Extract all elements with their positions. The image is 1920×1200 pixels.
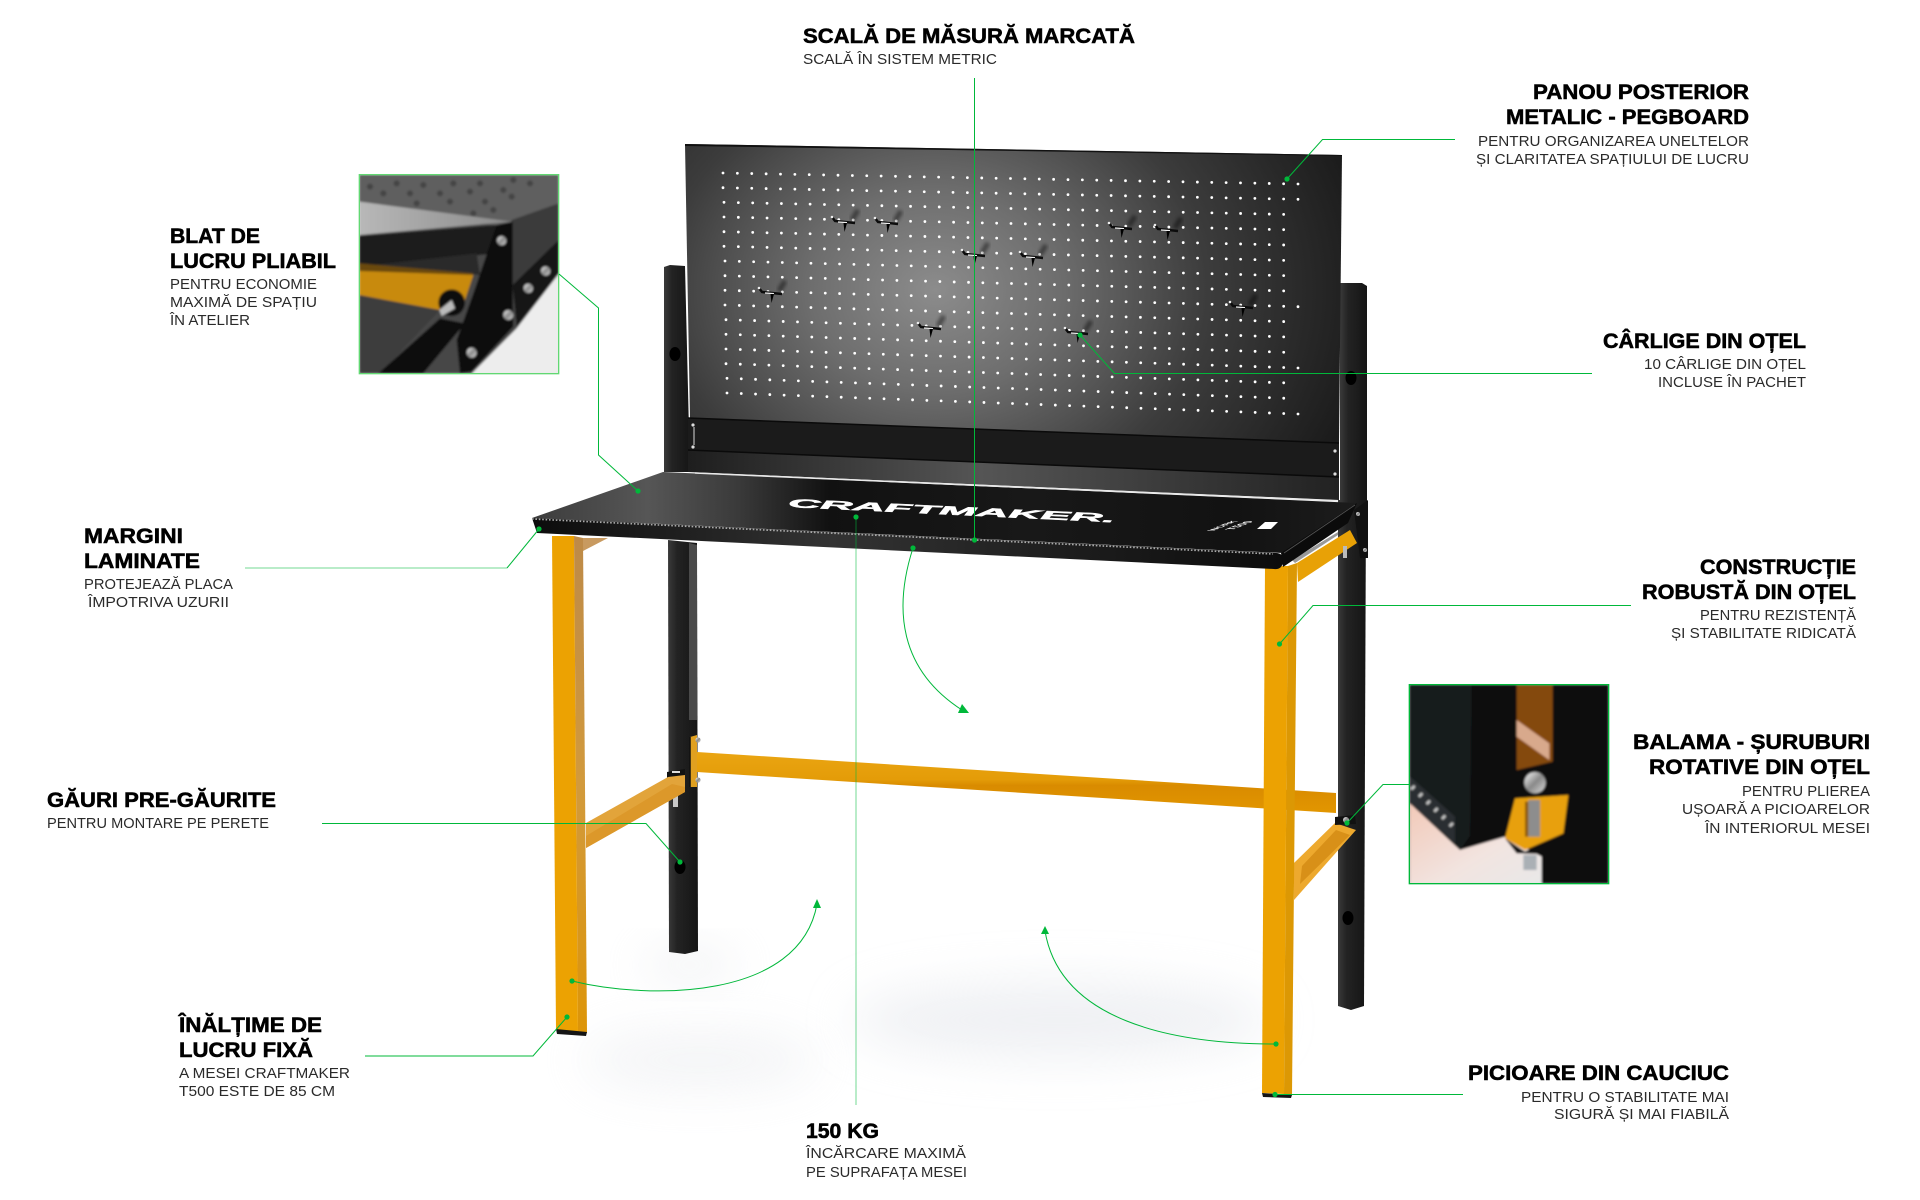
back posts	[664, 265, 1367, 505]
left hinge hardware	[667, 735, 701, 807]
heading	[1642, 556, 1856, 604]
leader line	[1077, 332, 1592, 374]
heading	[170, 225, 336, 273]
description: PENTRU MONTARE PE PERETE	[47, 816, 269, 832]
description: MAXIMĂ DE SPAȚIU	[170, 294, 317, 311]
callout: laminated edges	[84, 525, 542, 611]
heading	[1506, 81, 1749, 129]
description: PROTEJEAZĂ PLACA	[84, 576, 233, 593]
description: A MESEI CRAFTMAKER	[179, 1066, 350, 1082]
description: ÎN ATELIER	[169, 312, 250, 329]
description: 10 CÂRLIGE DIN OȚEL	[1644, 356, 1806, 373]
callout: fixed working height	[178, 1013, 570, 1100]
heading: 150 KG	[806, 1120, 879, 1143]
description: ÎMPOTRIVA UZURII	[87, 594, 229, 611]
leader line	[559, 274, 641, 494]
description	[84, 576, 233, 611]
side braces	[583, 538, 1356, 900]
workbench illustration	[532, 144, 1368, 1098]
leader line	[1284, 140, 1455, 182]
model mark on table: WORK	[1205, 520, 1241, 531]
pegboard holes	[723, 173, 1298, 414]
leader line	[365, 1014, 570, 1056]
description	[1476, 134, 1749, 168]
description: SCALĂ ÎN SISTEM METRIC	[803, 51, 997, 68]
callout: steel hooks	[1077, 329, 1806, 391]
description	[169, 277, 317, 329]
lower backsplash	[688, 418, 1339, 500]
heading	[1633, 731, 1870, 779]
heading: PICIOARE DIN CAUCIUC	[1468, 1062, 1729, 1085]
floor shadow	[580, 951, 1270, 1090]
leader line	[972, 78, 977, 543]
heading: ROTATIVE DIN OȚEL	[1649, 756, 1870, 779]
heading: PANOU POSTERIOR	[1533, 81, 1749, 104]
front right leg	[1262, 563, 1297, 1098]
heading	[84, 525, 200, 573]
description: PENTRU ORGANIZAREA UNELTELOR	[1478, 134, 1749, 150]
steel hooks	[758, 210, 1256, 343]
heading	[178, 1013, 322, 1062]
description: ÎN INTERIORUL MESEI	[1704, 820, 1870, 837]
right hinge bracket	[1354, 500, 1368, 558]
description: ȘI CLARITATEA SPAȚIULUI DE LUCRU	[1476, 152, 1749, 168]
heading: CONSTRUCȚIE	[1700, 556, 1856, 579]
description	[1671, 607, 1856, 642]
front left leg	[552, 536, 587, 1036]
description: PE SUPRAFAȚA MESEI	[806, 1165, 967, 1181]
brand name on table: CRAFTMAKER.	[788, 496, 1115, 525]
callout: metal pegboard panel	[1284, 81, 1749, 182]
leader line	[322, 824, 683, 865]
description	[805, 1145, 967, 1181]
inset photo: rotating hinge bolts	[1409, 685, 1609, 884]
heading: GĂURI PRE-GĂURITE	[47, 789, 276, 812]
heading: BALAMA - ȘURUBURI	[1633, 731, 1870, 754]
leader line	[245, 526, 542, 568]
arrow: right leg folds in	[1041, 926, 1279, 1047]
cross bar	[697, 752, 1336, 813]
description	[1682, 784, 1870, 837]
model mark on table	[1205, 520, 1278, 531]
description: PENTRU O STABILITATE MAI	[1521, 1090, 1729, 1106]
heading: ÎNĂLȚIME DE	[178, 1013, 322, 1037]
description: ȘI STABILITATE RIDICATĂ	[1671, 625, 1856, 642]
pegboard	[685, 144, 1342, 443]
description: INCLUSE ÎN PACHET	[1658, 374, 1806, 391]
description	[1644, 356, 1806, 391]
heading: ROBUSTĂ DIN OȚEL	[1642, 581, 1856, 604]
description: PENTRU PLIEREA	[1742, 784, 1870, 800]
leader line	[853, 514, 859, 1105]
heading: SCALĂ DE MĂSURĂ MARCATĂ	[803, 25, 1135, 48]
leader line	[1277, 606, 1631, 647]
description	[179, 1066, 350, 1100]
heading: LAMINATE	[84, 550, 200, 573]
model mark on table: T500	[1223, 521, 1257, 530]
heading: CÂRLIGE DIN OȚEL	[1603, 329, 1806, 353]
description: PENTRU ECONOMIE	[170, 277, 317, 293]
description	[1521, 1090, 1729, 1123]
callout: folding worktop	[169, 225, 641, 494]
callout: marked measuring scale	[803, 25, 1135, 543]
description: ÎNCĂRCARE MAXIMĂ	[805, 1145, 966, 1162]
heading: LUCRU FIXĂ	[179, 1039, 313, 1062]
heading: METALIC - PEGBOARD	[1506, 106, 1749, 129]
description: PENTRU REZISTENȚĂ	[1700, 607, 1856, 624]
callout: rubber feet	[1272, 1062, 1729, 1123]
description: SIGURĂ ȘI MAI FIABILĂ	[1554, 1106, 1729, 1123]
table top	[532, 472, 1357, 569]
callout: hinge with rotating bolts	[1344, 731, 1870, 837]
callout: pre-drilled holes	[47, 789, 683, 865]
callout: sturdy steel construction	[1277, 556, 1856, 647]
leader line	[1272, 1092, 1463, 1097]
description: UȘOARĂ A PICIOARELOR	[1682, 801, 1870, 818]
inset photo: folding worktop	[359, 175, 559, 374]
upper right brace	[1292, 530, 1357, 582]
leader line	[1344, 784, 1409, 826]
heading: MARGINI	[84, 525, 183, 548]
arrow: tabletop folds down	[903, 545, 969, 713]
back legs	[668, 500, 1366, 1010]
arrow: left leg folds in	[569, 899, 821, 991]
callout: 150 kg load	[805, 514, 967, 1181]
heading: BLAT DE	[170, 225, 260, 248]
description: T500 ESTE DE 85 CM	[179, 1084, 335, 1100]
heading: LUCRU PLIABIL	[170, 250, 336, 273]
